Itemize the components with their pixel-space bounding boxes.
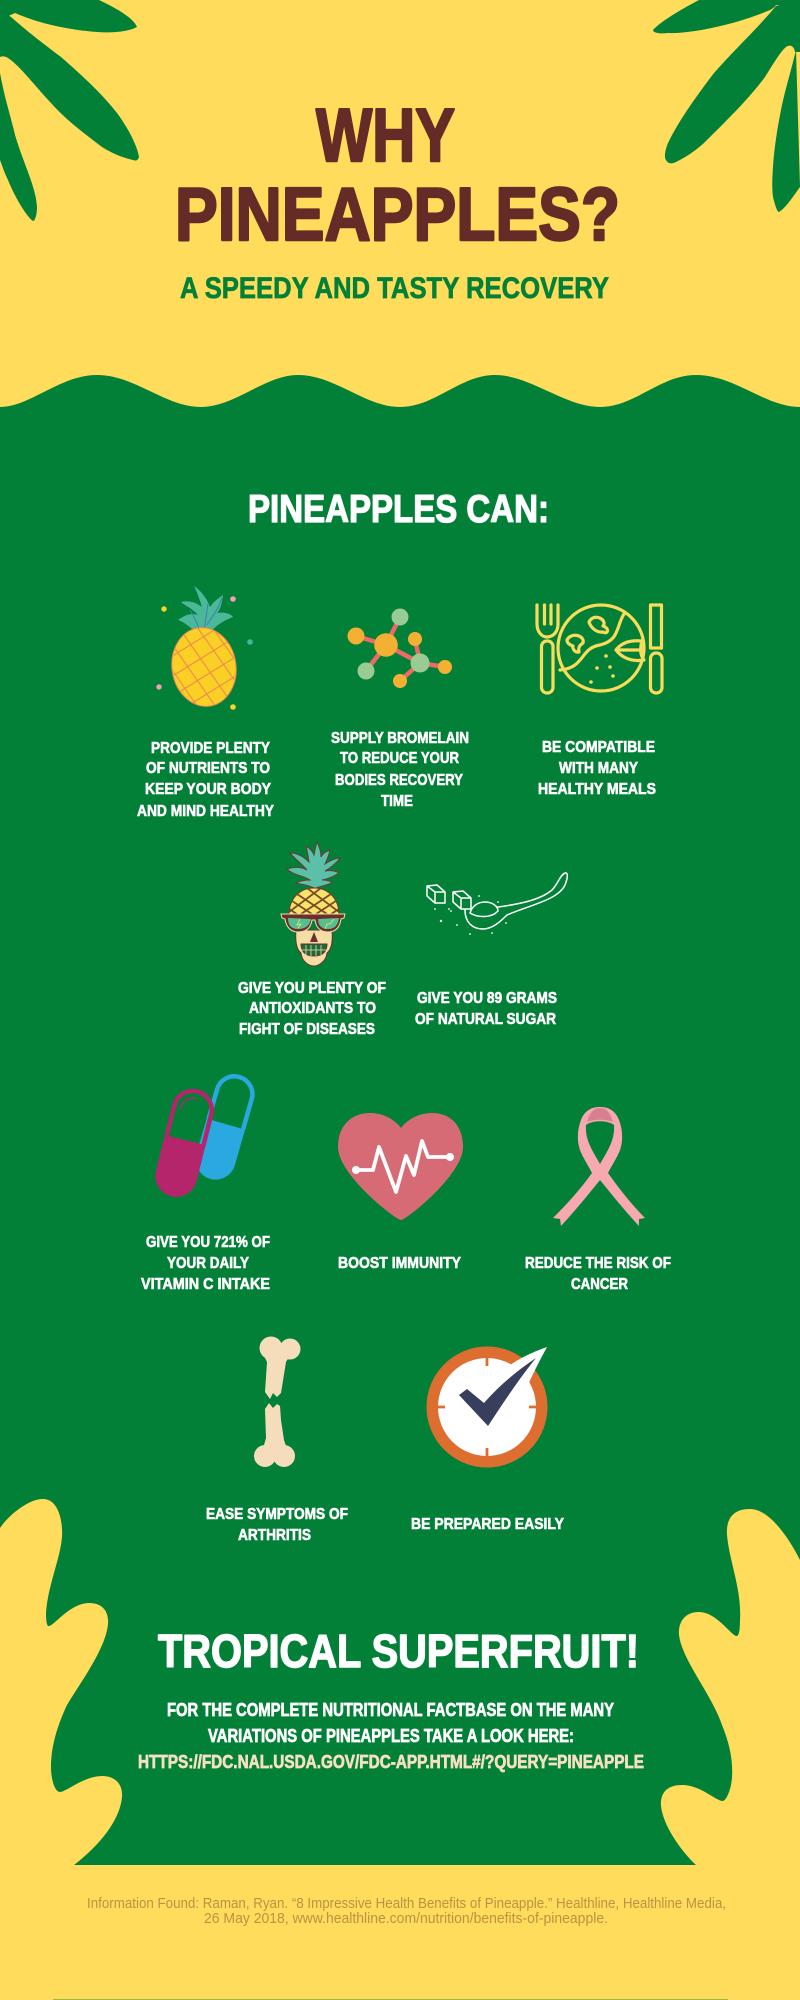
text: vitamin c: VITAMIN C INTAKE (141, 1276, 270, 1293)
icon: vitamin pills (151, 1072, 259, 1201)
text: provide nutrients: PROVIDE PLENTY (151, 740, 271, 757)
text: cancer: REDUCE THE RISK OF (525, 1255, 671, 1272)
yellow blob: bottom right (661, 1509, 800, 1865)
icon: spoon with sugar cubes (427, 873, 567, 935)
icon: pineapple (156, 586, 253, 710)
text: provide nutrients: AND MIND HEALTHY (137, 803, 275, 820)
heading: pineapples can: PINEAPPLES CAN: (248, 488, 549, 531)
icon: broken bone (254, 1336, 300, 1467)
text: antioxidants: ANTIOXIDANTS TO (249, 1000, 376, 1017)
icon: molecule (348, 608, 452, 688)
text: source citation (87, 1895, 726, 1927)
text: antioxidants: GIVE YOU PLENTY OF (238, 980, 386, 997)
text: nutritional factbase: FOR THE COMPLETE NUTRITIONAL FACTBASE ON THE MANY (167, 1700, 614, 1720)
text: compatible meals: HEALTHY MEALS (538, 781, 656, 798)
icon: pineapple skull with sunglasses (280, 842, 348, 966)
title: WHY (316, 93, 455, 177)
text: supply bromelain: SUPPLY BROMELAIN (331, 730, 469, 747)
text: provide nutrients (137, 740, 275, 820)
text: boost immunity: BOOST IMMUNITY (338, 1255, 462, 1272)
icon: heart with pulse (338, 1113, 463, 1220)
text: vitamin c (141, 1234, 270, 1293)
text: antioxidants (238, 980, 386, 1038)
text: provide nutrients: KEEP YOUR BODY (145, 781, 272, 798)
text: nutritional factbase: VARIATIONS OF PINEAPPLES TAKE A LOOK HERE: (208, 1726, 574, 1746)
text: supply bromelain: TIME (381, 793, 413, 810)
leaves: top right (653, 0, 800, 212)
text: natural sugar (415, 990, 557, 1028)
heading: tropical superfruit: TROPICAL SUPERFRUIT! (158, 1625, 639, 1677)
text: compatible meals: BE COMPATIBLE (542, 739, 655, 756)
text: be prepared: BE PREPARED EASILY (411, 1516, 565, 1533)
text: cancer: CANCER (571, 1276, 628, 1293)
text: supply bromelain: BODIES RECOVERY (335, 772, 464, 789)
text: natural sugar: GIVE YOU 89 GRAMS (417, 990, 557, 1007)
text: arthritis: ARTHRITIS (238, 1527, 311, 1544)
title (175, 93, 620, 256)
leaves: top left (0, 0, 139, 221)
text: cancer (525, 1255, 671, 1293)
text: compatible meals: WITH MANY (559, 760, 639, 777)
text: provide nutrients: OF NUTRIENTS TO (146, 760, 270, 777)
text: nutritional factbase (167, 1700, 614, 1746)
yellow blob: bottom left (0, 1499, 122, 1865)
text: link: HTTPS://FDC.NAL.USDA.GOV/FDC-APP.HTML#/?QUERY=PINEAPPLE (138, 1752, 644, 1772)
icon: clock with check mark (426, 1346, 548, 1468)
text: supply bromelain: TO REDUCE YOUR (340, 750, 459, 767)
text: compatible meals (538, 739, 656, 798)
text: arthritis: EASE SYMPTOMS OF (206, 1506, 348, 1523)
icon: awareness ribbon (553, 1107, 645, 1226)
text: vitamin c: GIVE YOU 721% OF (146, 1234, 270, 1251)
title: PINEAPPLES? (175, 172, 620, 256)
text: supply bromelain (331, 730, 469, 810)
text: natural sugar: OF NATURAL SUGAR (415, 1011, 556, 1028)
green wavy panel (0, 375, 800, 1865)
subtitle: A SPEEDY AND TASTY RECOVERY (180, 272, 609, 305)
icon: plate and cutlery (537, 605, 662, 693)
text: vitamin c: YOUR DAILY (167, 1255, 250, 1272)
text: arthritis (206, 1506, 348, 1544)
text: source citation: 26 May 2018, www.healthline.com/nutrition/benefits-of-pineapple. (204, 1910, 608, 1927)
text: source citation: Information Found: Raman, Ryan. “8 Impressive Health Benefits of Pineapple.” Healthline, Healthline Media, (87, 1895, 726, 1912)
text: antioxidants: FIGHT OF DISEASES (239, 1021, 375, 1038)
